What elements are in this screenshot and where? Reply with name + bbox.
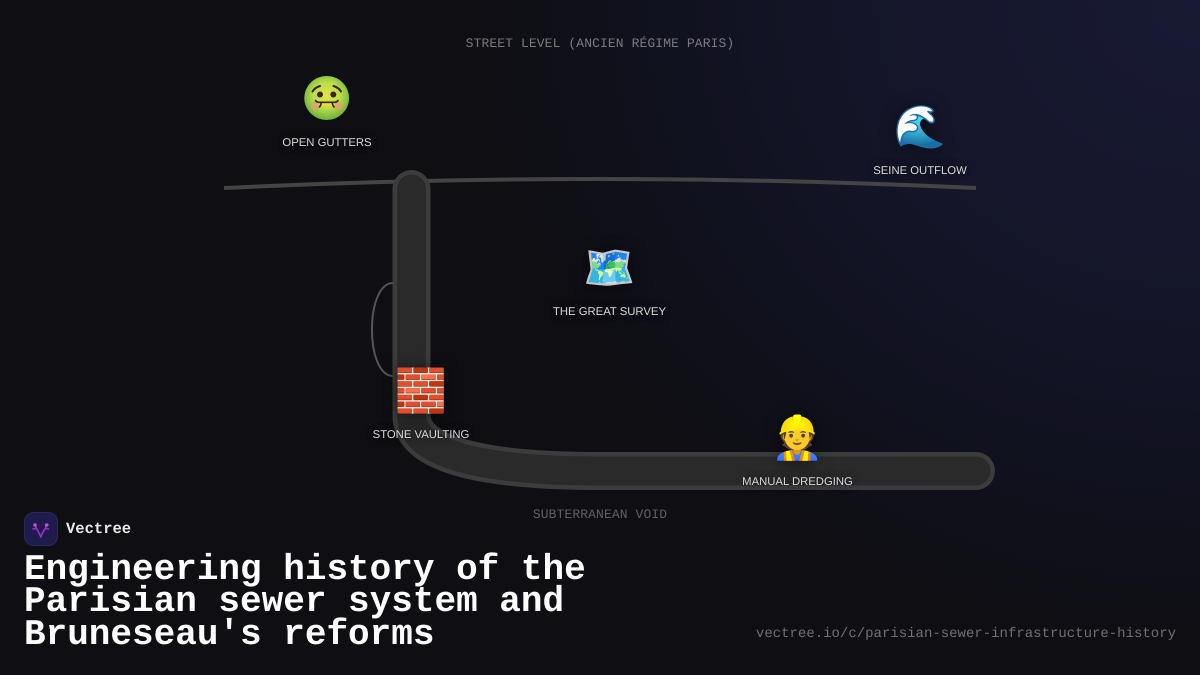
icon: Vectree logo: [24, 512, 58, 546]
icon: nauseated face: [304, 76, 350, 120]
node: stone vaulting: STONE VAULTING: [373, 429, 469, 441]
side branch conduit: [372, 283, 393, 376]
node: the great survey: 🗺️: [583, 244, 636, 293]
node: manual dredging: MANUAL DREDGING: [742, 476, 853, 488]
node: seine outflow: 🌊: [894, 103, 946, 152]
node: seine outflow: SEINE OUTFLOW: [873, 165, 967, 177]
source url: vectree.io/c/parisian-sewer-infrastructure-history: [756, 626, 1176, 642]
title: Parisian sewer system and: [24, 581, 564, 622]
node: the great survey: THE GREAT SURVEY: [553, 306, 666, 318]
title: Engineering history of the: [24, 549, 586, 590]
node: stone vaulting: 🧱: [395, 367, 447, 416]
main sewer tunnel: [412, 189, 976, 471]
node: manual dredging: 👷: [771, 414, 824, 463]
node: stone vaulting: [373, 364, 469, 441]
title: [24, 549, 586, 655]
title: Bruneseau's reforms: [24, 614, 434, 655]
node: manual dredging: [742, 414, 853, 488]
node: open gutters: [282, 76, 372, 149]
node: the great survey: [553, 244, 666, 318]
node: open gutters: OPEN GUTTERS: [282, 137, 372, 149]
brand: Vectree: [24, 512, 131, 546]
label: subterranean void: SUBTERRANEAN VOID: [533, 507, 667, 522]
street level line: [224, 179, 976, 188]
node: seine outflow: [873, 103, 967, 177]
label: street level: STREET LEVEL (ANCIEN RÉGIME PARIS): [466, 36, 734, 51]
brand name: Vectree: [66, 520, 131, 538]
